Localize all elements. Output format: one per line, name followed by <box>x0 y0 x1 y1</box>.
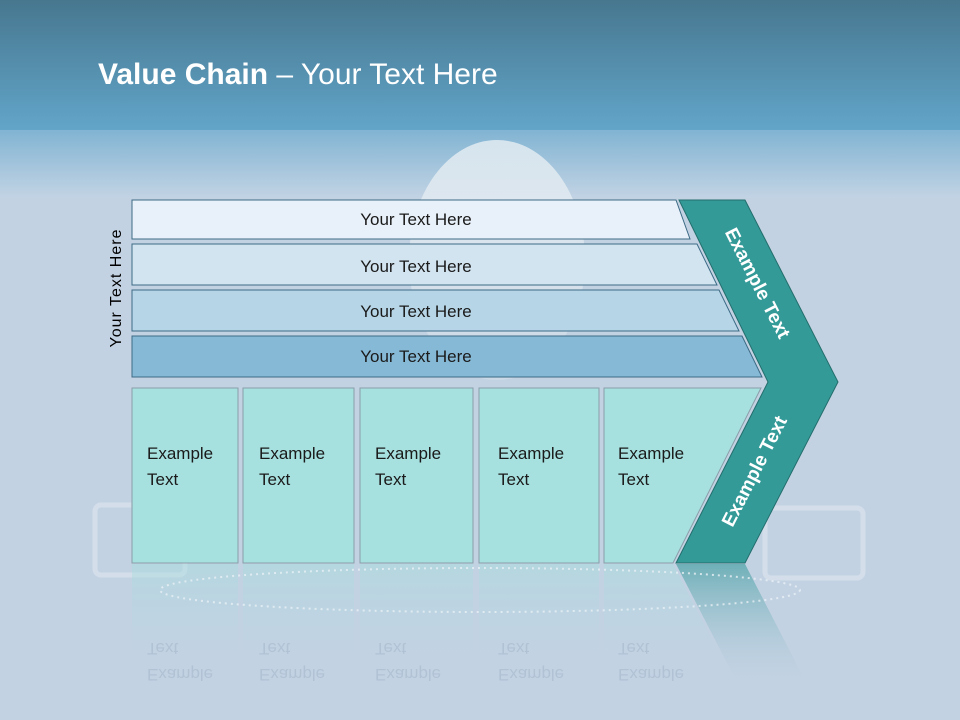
chevron: Example Text <box>720 225 794 343</box>
reflection <box>132 564 812 694</box>
band 4 <box>132 336 762 377</box>
column texts <box>147 444 684 489</box>
reflection: Example <box>498 665 564 684</box>
column texts: Text <box>147 470 178 489</box>
band 2 <box>132 244 717 285</box>
side label: Your Text Here <box>108 229 125 347</box>
column texts: Text <box>259 470 290 489</box>
columns <box>132 388 761 563</box>
reflection: Text <box>259 639 290 658</box>
band 4: Your Text Here <box>360 347 472 366</box>
reflection: Example <box>259 665 325 684</box>
column texts: Text <box>375 470 406 489</box>
chevron <box>676 200 838 563</box>
band 1: Your Text Here <box>360 210 472 229</box>
column texts: Example <box>147 444 213 463</box>
chevron: Example Text <box>718 412 792 530</box>
reflection: Example <box>147 665 213 684</box>
reflection: Text <box>375 639 406 658</box>
column texts: Example <box>375 444 441 463</box>
band 3: Your Text Here <box>360 302 472 321</box>
reflection: Example <box>375 665 441 684</box>
band 3 <box>132 290 739 331</box>
column texts: Text <box>498 470 529 489</box>
column texts: Text <box>618 470 649 489</box>
title: Value Chain – Your Text Here <box>98 58 498 91</box>
column texts: Example <box>618 444 684 463</box>
reflection: Text <box>498 639 529 658</box>
band 2: Your Text Here <box>360 257 472 276</box>
reflection: Text <box>618 639 649 658</box>
column texts: Example <box>498 444 564 463</box>
reflection: Text <box>147 639 178 658</box>
band 1 <box>132 200 690 239</box>
column texts: Example <box>259 444 325 463</box>
reflection: Example <box>618 665 684 684</box>
